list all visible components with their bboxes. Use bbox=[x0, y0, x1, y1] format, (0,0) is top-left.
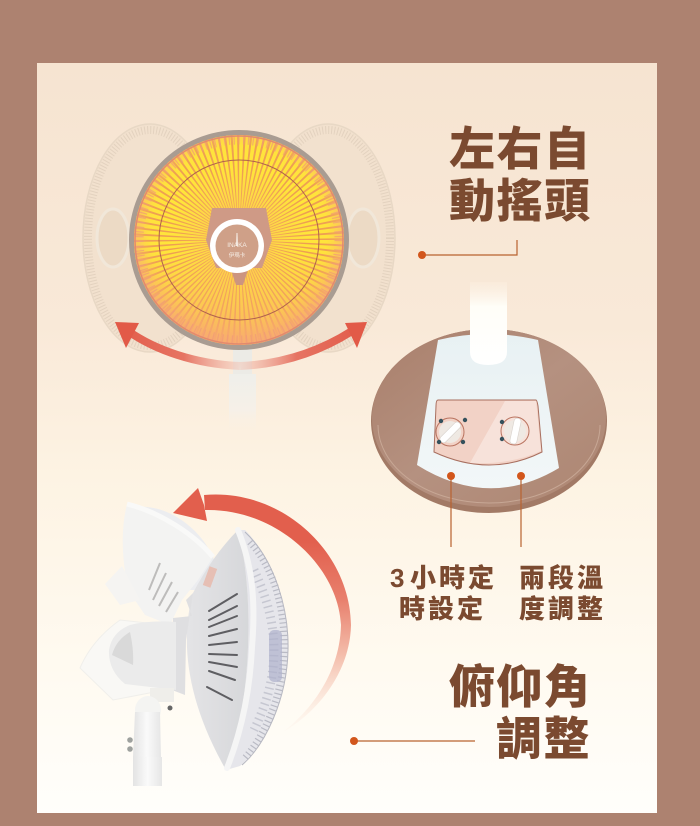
brand logo: 伊瑪卡 bbox=[229, 251, 246, 259]
label: temperature: 度調整 bbox=[519, 594, 603, 624]
illustration: swinging heater bbox=[83, 124, 395, 434]
knob: timer bbox=[436, 418, 467, 446]
warning label bbox=[203, 566, 217, 588]
knob: temperature bbox=[500, 417, 529, 445]
callout line: temperature bbox=[517, 472, 525, 547]
joint bracket bbox=[150, 688, 174, 710]
motor housing bbox=[109, 621, 176, 690]
callout line: swing bbox=[418, 240, 517, 259]
label: timer bbox=[390, 563, 494, 624]
callout line: tilt bbox=[350, 737, 475, 745]
heading: tilt: 調整 bbox=[496, 713, 591, 765]
label: temperature bbox=[519, 563, 603, 624]
vent slots bbox=[207, 594, 237, 700]
centre bracket bbox=[206, 208, 272, 268]
housing detail bbox=[112, 632, 133, 665]
heading: tilt bbox=[449, 661, 592, 765]
dish body bbox=[187, 530, 248, 770]
label: timer: 3小時定 bbox=[390, 563, 494, 593]
base plate bbox=[417, 334, 559, 488]
base pole bbox=[470, 282, 507, 365]
heading: tilt: 俯仰角 bbox=[449, 661, 592, 713]
heater head bbox=[129, 130, 349, 350]
brand logo: INAKA bbox=[227, 242, 247, 249]
swing arrow right bbox=[240, 322, 367, 366]
tilt stem bbox=[127, 696, 162, 786]
collar bbox=[172, 593, 193, 695]
front grille bbox=[226, 530, 288, 770]
heading: swing bbox=[449, 123, 592, 227]
heading: swing: 動搖頭 bbox=[449, 175, 592, 227]
callout line: timer bbox=[447, 472, 455, 547]
radial wire grille bbox=[179, 180, 299, 300]
tilt arrow bbox=[173, 488, 351, 732]
dish rim bbox=[227, 530, 253, 768]
ghost heater: right position bbox=[261, 124, 395, 352]
heading: swing: 左右自 bbox=[449, 123, 592, 175]
label: timer: 時設定 bbox=[399, 594, 483, 624]
brand logo bbox=[227, 233, 247, 259]
ghost heater: left position bbox=[83, 124, 217, 352]
illustration: heater base bbox=[371, 282, 607, 513]
ghost head, tilted back bbox=[80, 504, 216, 700]
illustration: tilting heater, side view bbox=[80, 488, 351, 786]
label: temperature: 兩段溫 bbox=[519, 563, 603, 593]
swing arrow left bbox=[115, 322, 240, 366]
heater pole bbox=[229, 345, 256, 434]
control panel bbox=[434, 400, 542, 465]
